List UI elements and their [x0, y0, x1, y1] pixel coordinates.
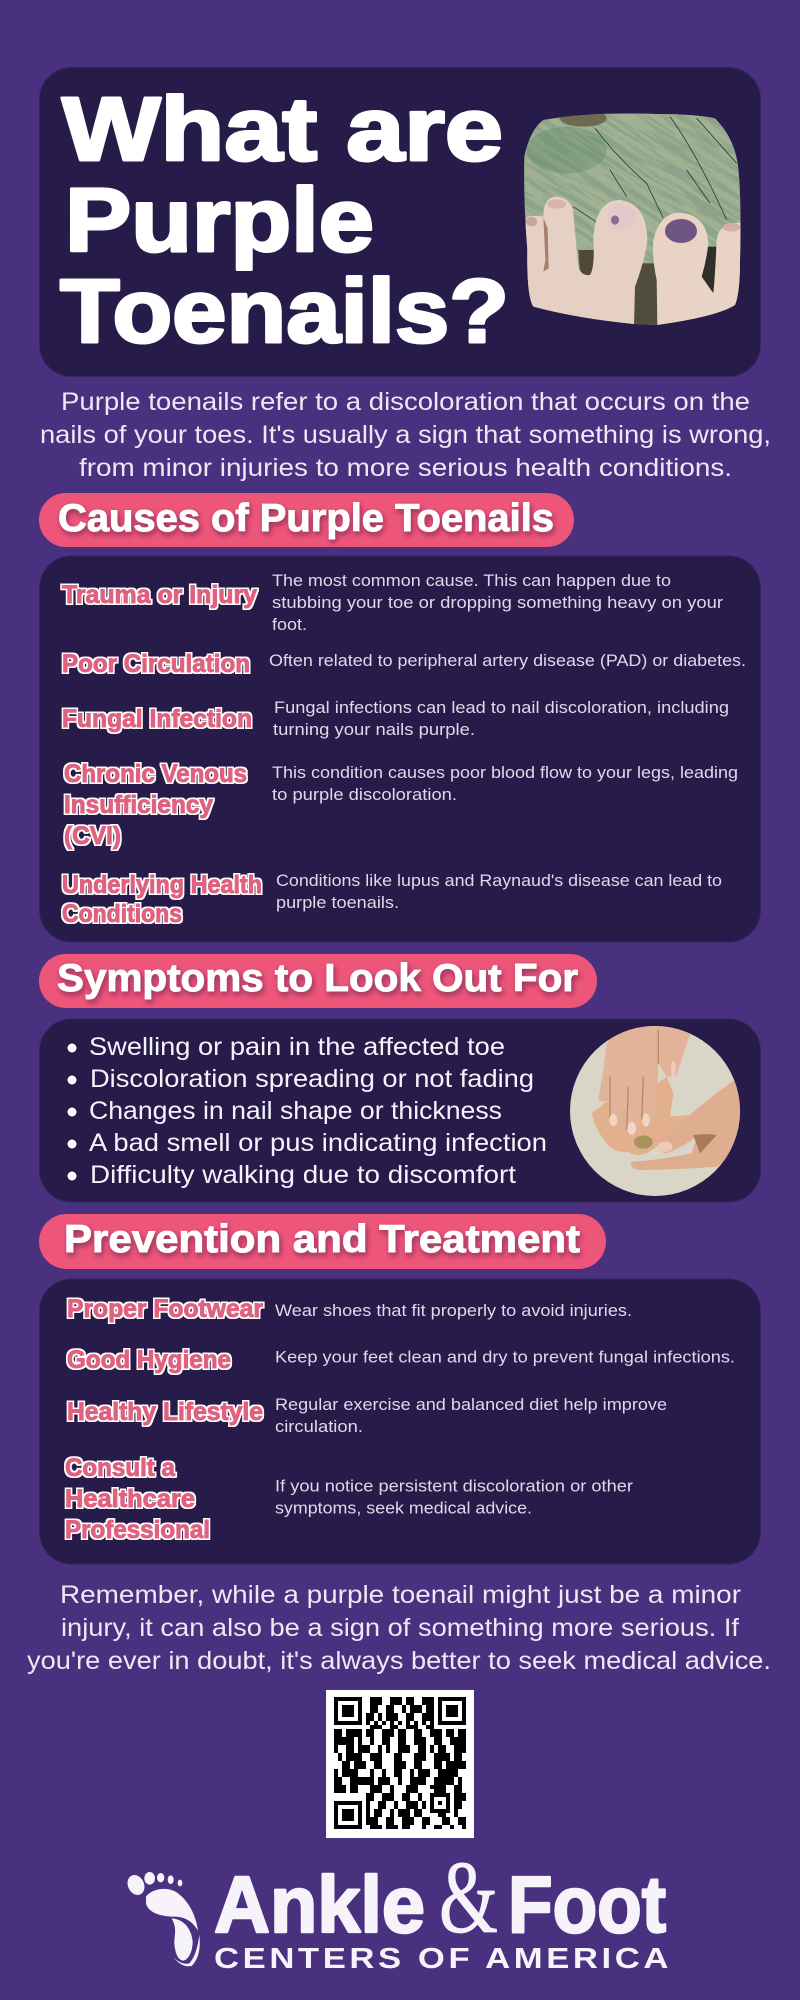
title: Purple [65, 171, 374, 271]
cause: trauma or injury: stubbing your toe or dropping something heavy on your [272, 594, 724, 612]
tip: proper footwear [67, 1295, 632, 1323]
cause: underlying health conditions: Conditions like lupus and Raynaud's disease can lead to [276, 872, 722, 890]
heading: causes: Causes of Purple Toenails [58, 497, 554, 540]
heading: prevention [39, 1214, 606, 1269]
cause: chronic venous insufficiency: This condition causes poor blood flow to your legs, leading [272, 764, 738, 782]
symptoms list: Difficulty walking due to discomfort [90, 1161, 516, 1189]
tip: good hygiene: Keep your feet clean and dry to prevent fungal infections. [275, 1348, 735, 1366]
symptoms list: A bad smell or pus indicating infection [89, 1129, 547, 1157]
panel: symptoms [40, 1019, 760, 1202]
tip: healthy lifestyle [67, 1396, 667, 1436]
tip: good hygiene [67, 1346, 735, 1374]
tip: consult a healthcare professional: symptoms, seek medical advice. [275, 1500, 532, 1518]
title [60, 80, 509, 362]
logo: Ankle & Foot Centers of America: Foot [508, 1860, 666, 1949]
tip: consult a healthcare professional [65, 1454, 634, 1544]
intro text: from minor injuries to more serious health conditions. [79, 454, 732, 482]
tip: consult a healthcare professional: Healthcare [65, 1485, 195, 1513]
symptoms list: Changes in nail shape or thickness [89, 1097, 502, 1125]
title: What are [62, 80, 503, 180]
heading: symptoms: Symptoms to Look Out For [57, 957, 578, 1000]
symptoms list: Discoloration spreading or not fading [90, 1065, 534, 1093]
icon: footprint [124, 1872, 200, 1966]
cause: underlying health conditions [62, 871, 722, 928]
cause: poor circulation [62, 650, 746, 678]
closing text: injury, it can also be a sign of something more serious. If [61, 1614, 739, 1642]
cause: underlying health conditions: Conditions [62, 900, 182, 928]
cause: trauma or injury [62, 572, 724, 634]
cause: chronic venous insufficiency: Chronic Venous [64, 760, 247, 788]
tip: good hygiene: Good Hygiene [67, 1346, 231, 1374]
cause: fungal infection: Fungal infections can lead to nail discoloration, including [274, 699, 729, 717]
tip: proper footwear: Wear shoes that fit properly to avoid injuries. [275, 1302, 632, 1320]
cause: trauma or injury: foot. [272, 616, 307, 634]
closing text: you're ever in doubt, it's always better to seek medical advice. [27, 1647, 771, 1675]
QR code [326, 1690, 474, 1838]
closing text [27, 1581, 771, 1675]
logo: Ankle & Foot Centers of America: CENTERS OF AMERICA [214, 1943, 672, 1975]
panel: title header [39, 67, 761, 377]
cause: chronic venous insufficiency [64, 760, 738, 850]
panel: prevention [40, 1279, 760, 1564]
cause: fungal infection: turning your nails purple. [273, 721, 475, 739]
intro text: Purple toenails refer to a discoloration that occurs on the [61, 388, 750, 416]
cause: underlying health conditions: purple toenails. [276, 894, 399, 912]
title: Toenails? [60, 262, 509, 362]
intro text: nails of your toes. It's usually a sign that something is wrong, [40, 421, 771, 449]
tip: consult a healthcare professional: If you notice persistent discoloration or other [275, 1478, 634, 1496]
tip: consult a healthcare professional: Professional [65, 1516, 210, 1544]
symptoms list: Swelling or pain in the affected toe [89, 1033, 505, 1061]
cause: underlying health conditions: Underlying Health [62, 871, 262, 899]
tip: healthy lifestyle: Healthy Lifestyle [67, 1398, 263, 1426]
cause: poor circulation: Poor Circulation [62, 650, 250, 678]
cause: chronic venous insufficiency: to purple discoloration. [272, 786, 457, 804]
cause: trauma or injury: The most common cause. This can happen due to [272, 572, 671, 590]
tip: healthy lifestyle: circulation. [275, 1418, 363, 1436]
cause: chronic venous insufficiency: Insufficiency [64, 791, 213, 819]
heading: prevention: Prevention and Treatment [64, 1218, 580, 1261]
cause: fungal infection: Fungal Infection [62, 705, 252, 733]
tip: healthy lifestyle: Regular exercise and balanced diet help improve [275, 1396, 667, 1414]
intro text [40, 388, 771, 482]
panel: causes [40, 556, 760, 942]
closing text: Remember, while a purple toenail might just be a minor [60, 1581, 741, 1609]
image: toes with purple nails on wood [524, 114, 740, 325]
cause: poor circulation: Often related to peripheral artery disease (PAD) or diabetes. [269, 652, 746, 670]
logo: Ankle & Foot Centers of America: Ankle [214, 1860, 425, 1949]
logo: Ankle & Foot Centers of America: & [439, 1840, 498, 1955]
cause: fungal infection [62, 699, 729, 739]
symptoms list [68, 1033, 547, 1189]
cause: chronic venous insufficiency: (CVI) [64, 822, 121, 850]
image: hands examining toe [567, 1023, 747, 1200]
cause: trauma or injury: Trauma or Injury [62, 581, 257, 609]
logo: Ankle & Foot Centers of America [124, 1840, 672, 1975]
tip: proper footwear: Proper Footwear [67, 1295, 263, 1323]
tip: consult a healthcare professional: Consult a [65, 1454, 176, 1482]
